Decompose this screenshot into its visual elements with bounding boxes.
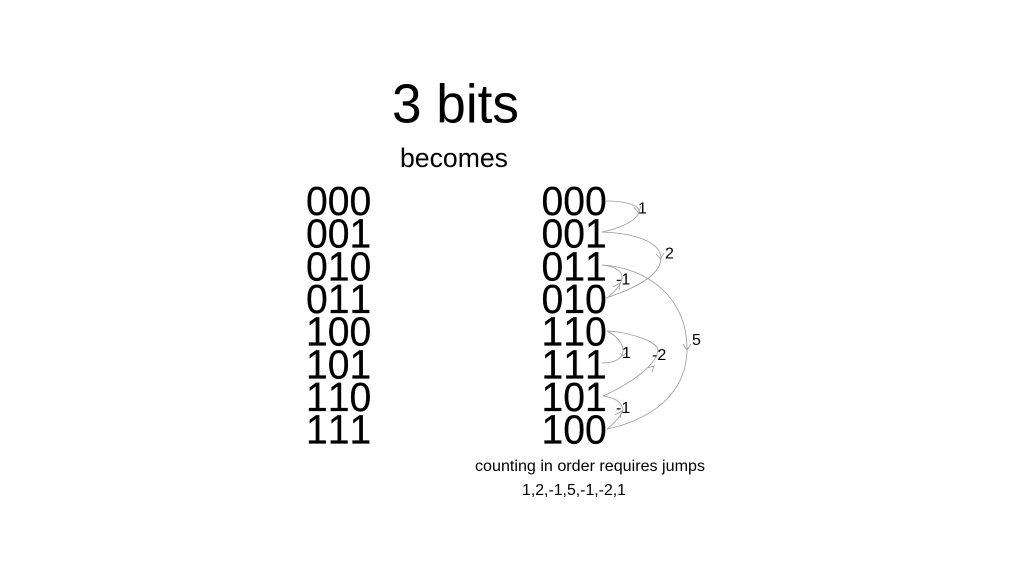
left column: binary order: 110: [306, 375, 371, 420]
right column: gray code order: 111: [542, 343, 607, 388]
right column: gray code order: 010: [542, 277, 607, 322]
subheading: becomes: becomes: [400, 143, 508, 173]
arrow: jump 1 lower: 1: [622, 345, 631, 362]
arrow: jump -1 upper: -1: [616, 272, 630, 288]
arrow: jump 1: 1: [638, 200, 647, 218]
left column: binary order: 000: [306, 179, 371, 224]
arrow: jump 1: [602, 200, 647, 232]
right column: gray code order: 110: [542, 310, 607, 355]
arrow: jump -1 upper: [602, 265, 630, 298]
right column: gray code order: 011: [542, 245, 607, 290]
left column: binary order: 100: [306, 310, 371, 355]
right column: gray code order: 001: [542, 212, 607, 257]
arrow: jump -2: [603, 331, 666, 396]
right column: gray code order: 100: [542, 408, 607, 453]
arrow: jump -1 lower: [603, 396, 630, 429]
arrow: jump 2: [602, 232, 674, 298]
left column: binary order: 101: [306, 343, 371, 388]
left column: binary order: 011: [306, 277, 371, 322]
left column: binary order: 001: [306, 212, 371, 257]
jump sequence: 1,2,-1,5,-1,-2,1: [522, 482, 626, 499]
arrow: jump 5: [602, 265, 701, 429]
arrow: jump 5: 5: [692, 332, 701, 349]
left column: binary order: [306, 179, 371, 453]
arrow: jump 2: 2: [665, 246, 674, 262]
right column: gray code order: 101: [542, 375, 607, 420]
right column: gray code order: 000: [542, 179, 607, 224]
arrow: jump -2: -2: [652, 347, 666, 364]
caption: counting in order requires jumps: [475, 458, 705, 475]
arrow: jump -1 lower: -1: [616, 400, 630, 417]
arrow: jump 1 lower: [602, 331, 631, 363]
left column: binary order: 111: [306, 408, 371, 453]
title: 3 bits: [392, 72, 519, 134]
left column: binary order: 010: [306, 245, 371, 290]
right column: gray code order: [542, 179, 607, 453]
